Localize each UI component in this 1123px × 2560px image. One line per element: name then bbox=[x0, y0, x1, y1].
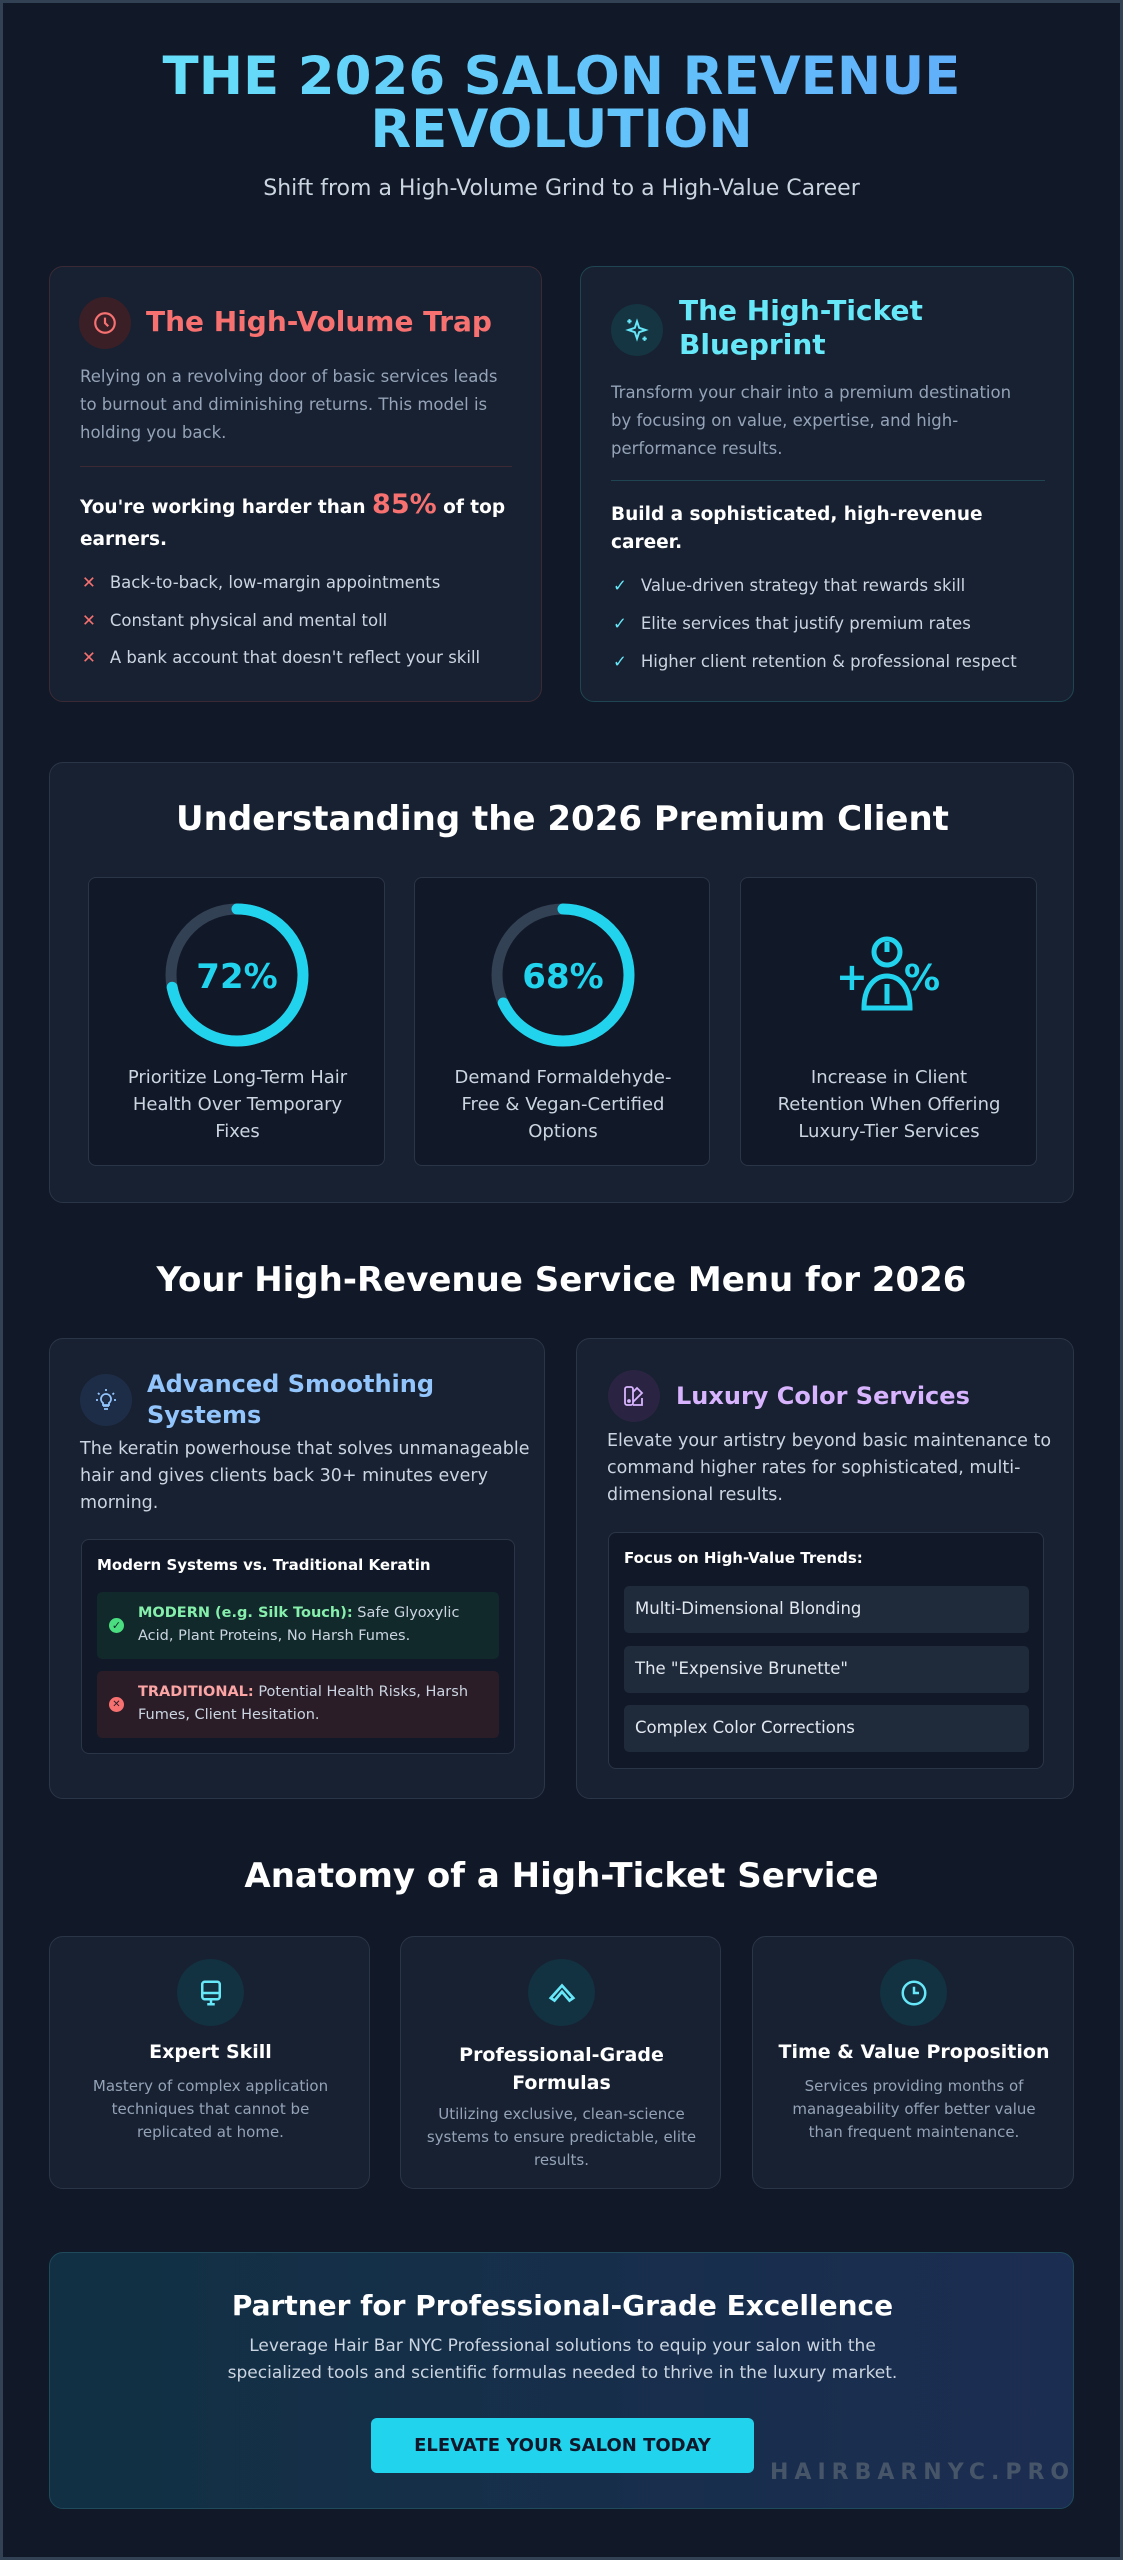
list: problems bbox=[82, 573, 480, 667]
label: Increase in Client Retention When Offering Luxury-Tier Services bbox=[778, 1067, 1000, 1142]
modern row: MODERN (e.g. Silk Touch): Safe Glyoxylic Acid, Plant Proteins, No Harsh Fumes. bbox=[138, 1605, 459, 1644]
title: REVOLUTION bbox=[370, 99, 753, 160]
description: Utilizing exclusive, clean-science systems to ensure predictable, elite results. bbox=[427, 2105, 696, 2169]
traditional row: TRADITIONAL: Potential Health Risks, Harsh Fumes, Client Hesitation. bbox=[138, 1684, 468, 1723]
trends box: The "Expensive Brunette" bbox=[635, 1659, 848, 1678]
title: Formulas bbox=[512, 2072, 611, 2094]
panel: CTA bbox=[49, 2252, 1074, 2509]
heading bbox=[679, 294, 923, 361]
stat card: 72% bbox=[88, 877, 385, 1166]
list: benefits: ✓ Value-driven strategy that rewards skill bbox=[613, 576, 965, 595]
title bbox=[0, 50, 1123, 156]
heading: Advanced Smoothing bbox=[147, 1370, 434, 1398]
button: ELEVATE YOUR SALON TODAY bbox=[414, 2435, 711, 2456]
CTA heading: Partner for Professional-Grade Excellence bbox=[232, 2289, 893, 2322]
icon: sparkle bbox=[611, 304, 663, 356]
stat card: 68% bbox=[414, 877, 710, 1166]
panel: luxury color bbox=[576, 1338, 1074, 1799]
chart: ring 72% bbox=[166, 904, 308, 1046]
list: problems: ✕ A bank account that doesn't reflect your skill bbox=[82, 648, 480, 667]
trends box bbox=[608, 1532, 1044, 1769]
comparison box bbox=[81, 1539, 515, 1754]
title: Time & Value Proposition bbox=[778, 2041, 1049, 2063]
icon: clock bbox=[79, 297, 131, 349]
heading: anatomy: Anatomy of a High-Ticket Service bbox=[244, 1856, 879, 1896]
CTA text: Leverage Hair Bar NYC Professional solutions to equip your salon with the specialized tools and scientific formulas needed to thrive in the luxury market. bbox=[228, 2336, 897, 2383]
trend items: Multi-Dimensional Blonding bbox=[635, 1599, 861, 1618]
icon: bulb bbox=[80, 1374, 132, 1426]
subtitle: Shift from a High-Volume Grind to a High-Value Career bbox=[263, 176, 860, 201]
chart: ring 68% bbox=[492, 904, 634, 1046]
icon: plus person percent: + bbox=[836, 955, 868, 999]
description: Mastery of complex application techniques that cannot be replicated at home. bbox=[93, 2077, 328, 2141]
modern row bbox=[97, 1592, 499, 1659]
stat line: Build a sophisticated, high-revenue career. bbox=[611, 504, 983, 553]
label: Prioritize Long-Term Hair Health Over Temporary Fixes bbox=[128, 1067, 347, 1142]
heading: The High-Ticket bbox=[679, 294, 923, 327]
comparison heading: Modern Systems vs. Traditional Keratin bbox=[97, 1556, 431, 1574]
heading: Blueprint bbox=[679, 328, 826, 361]
description: Elevate your artistry beyond basic maintenance to command higher rates for sophisticated, multi-dimensional results. bbox=[607, 1431, 1051, 1505]
list: problems: ✕ Constant physical and mental toll bbox=[82, 610, 387, 630]
trend items bbox=[624, 1586, 1029, 1633]
watermark: HAIRBARNYC.PRO bbox=[770, 2460, 1075, 2485]
list: benefits: ✓ Higher client retention & professional respect bbox=[613, 652, 1017, 671]
label: Demand Formaldehyde-Free & Vegan-Certified Options bbox=[454, 1067, 671, 1142]
card: time & value bbox=[752, 1936, 1074, 2189]
icon: monitor bbox=[177, 1959, 244, 2026]
panel: high-ticket blueprint bbox=[580, 266, 1074, 702]
description: Relying on a revolving door of basic services leads to burnout and diminishing returns. This model is holding you back. bbox=[80, 367, 497, 442]
traditional row: ✕ bbox=[112, 1699, 121, 1710]
list: benefits bbox=[613, 576, 1017, 671]
description: Transform your chair into a premium destination by focusing on value, expertise, and high-performance results. bbox=[611, 383, 1011, 458]
title: Expert Skill bbox=[149, 2041, 272, 2063]
icon: chevron bbox=[528, 1959, 595, 2026]
modern row: ✓ bbox=[112, 1619, 121, 1632]
stat card: retention bbox=[740, 877, 1037, 1166]
chart: ring 72%: 72% bbox=[196, 957, 278, 997]
heading bbox=[147, 1370, 434, 1429]
description: The keratin powerhouse that solves unmanageable hair and gives clients back 30+ minutes every morning. bbox=[80, 1439, 530, 1513]
list: benefits: ✓ Elite services that justify premium rates bbox=[613, 614, 971, 633]
heading: The High-Volume Trap bbox=[146, 305, 492, 338]
heading: service menu: Your High-Revenue Service Menu for 2026 bbox=[157, 1260, 966, 1300]
stat line: You're working harder than 85% of top earners. bbox=[80, 489, 505, 550]
list: problems: ✕ Back-to-back, low-margin appointments bbox=[82, 573, 440, 592]
title: THE 2026 SALON REVENUE bbox=[163, 46, 960, 107]
trends box: Complex Color Corrections bbox=[635, 1718, 855, 1737]
icon: clock bbox=[880, 1959, 947, 2026]
icon: swatch bbox=[608, 1370, 660, 1422]
description: Services providing months of manageability offer better value than frequent maintenance. bbox=[792, 2077, 1036, 2141]
card: formulas bbox=[400, 1936, 721, 2189]
panel: premium client bbox=[49, 762, 1074, 1203]
traditional row bbox=[97, 1671, 499, 1738]
card: expert skill bbox=[49, 1936, 370, 2189]
title: Professional-Grade bbox=[459, 2044, 664, 2066]
heading: Luxury Color Services bbox=[676, 1382, 970, 1410]
icon: plus person percent bbox=[836, 936, 940, 1010]
chart: ring 68%: 68% bbox=[522, 957, 604, 997]
heading: Understanding the 2026 Premium Client bbox=[176, 799, 949, 839]
panel: high-volume trap bbox=[49, 266, 542, 702]
heading: Systems bbox=[147, 1401, 261, 1429]
icon: plus person percent: % bbox=[904, 958, 940, 999]
panel: smoothing systems bbox=[49, 1338, 545, 1799]
trends heading: Focus on High-Value Trends: bbox=[624, 1549, 863, 1567]
title bbox=[459, 2044, 664, 2094]
button bbox=[371, 2418, 754, 2473]
